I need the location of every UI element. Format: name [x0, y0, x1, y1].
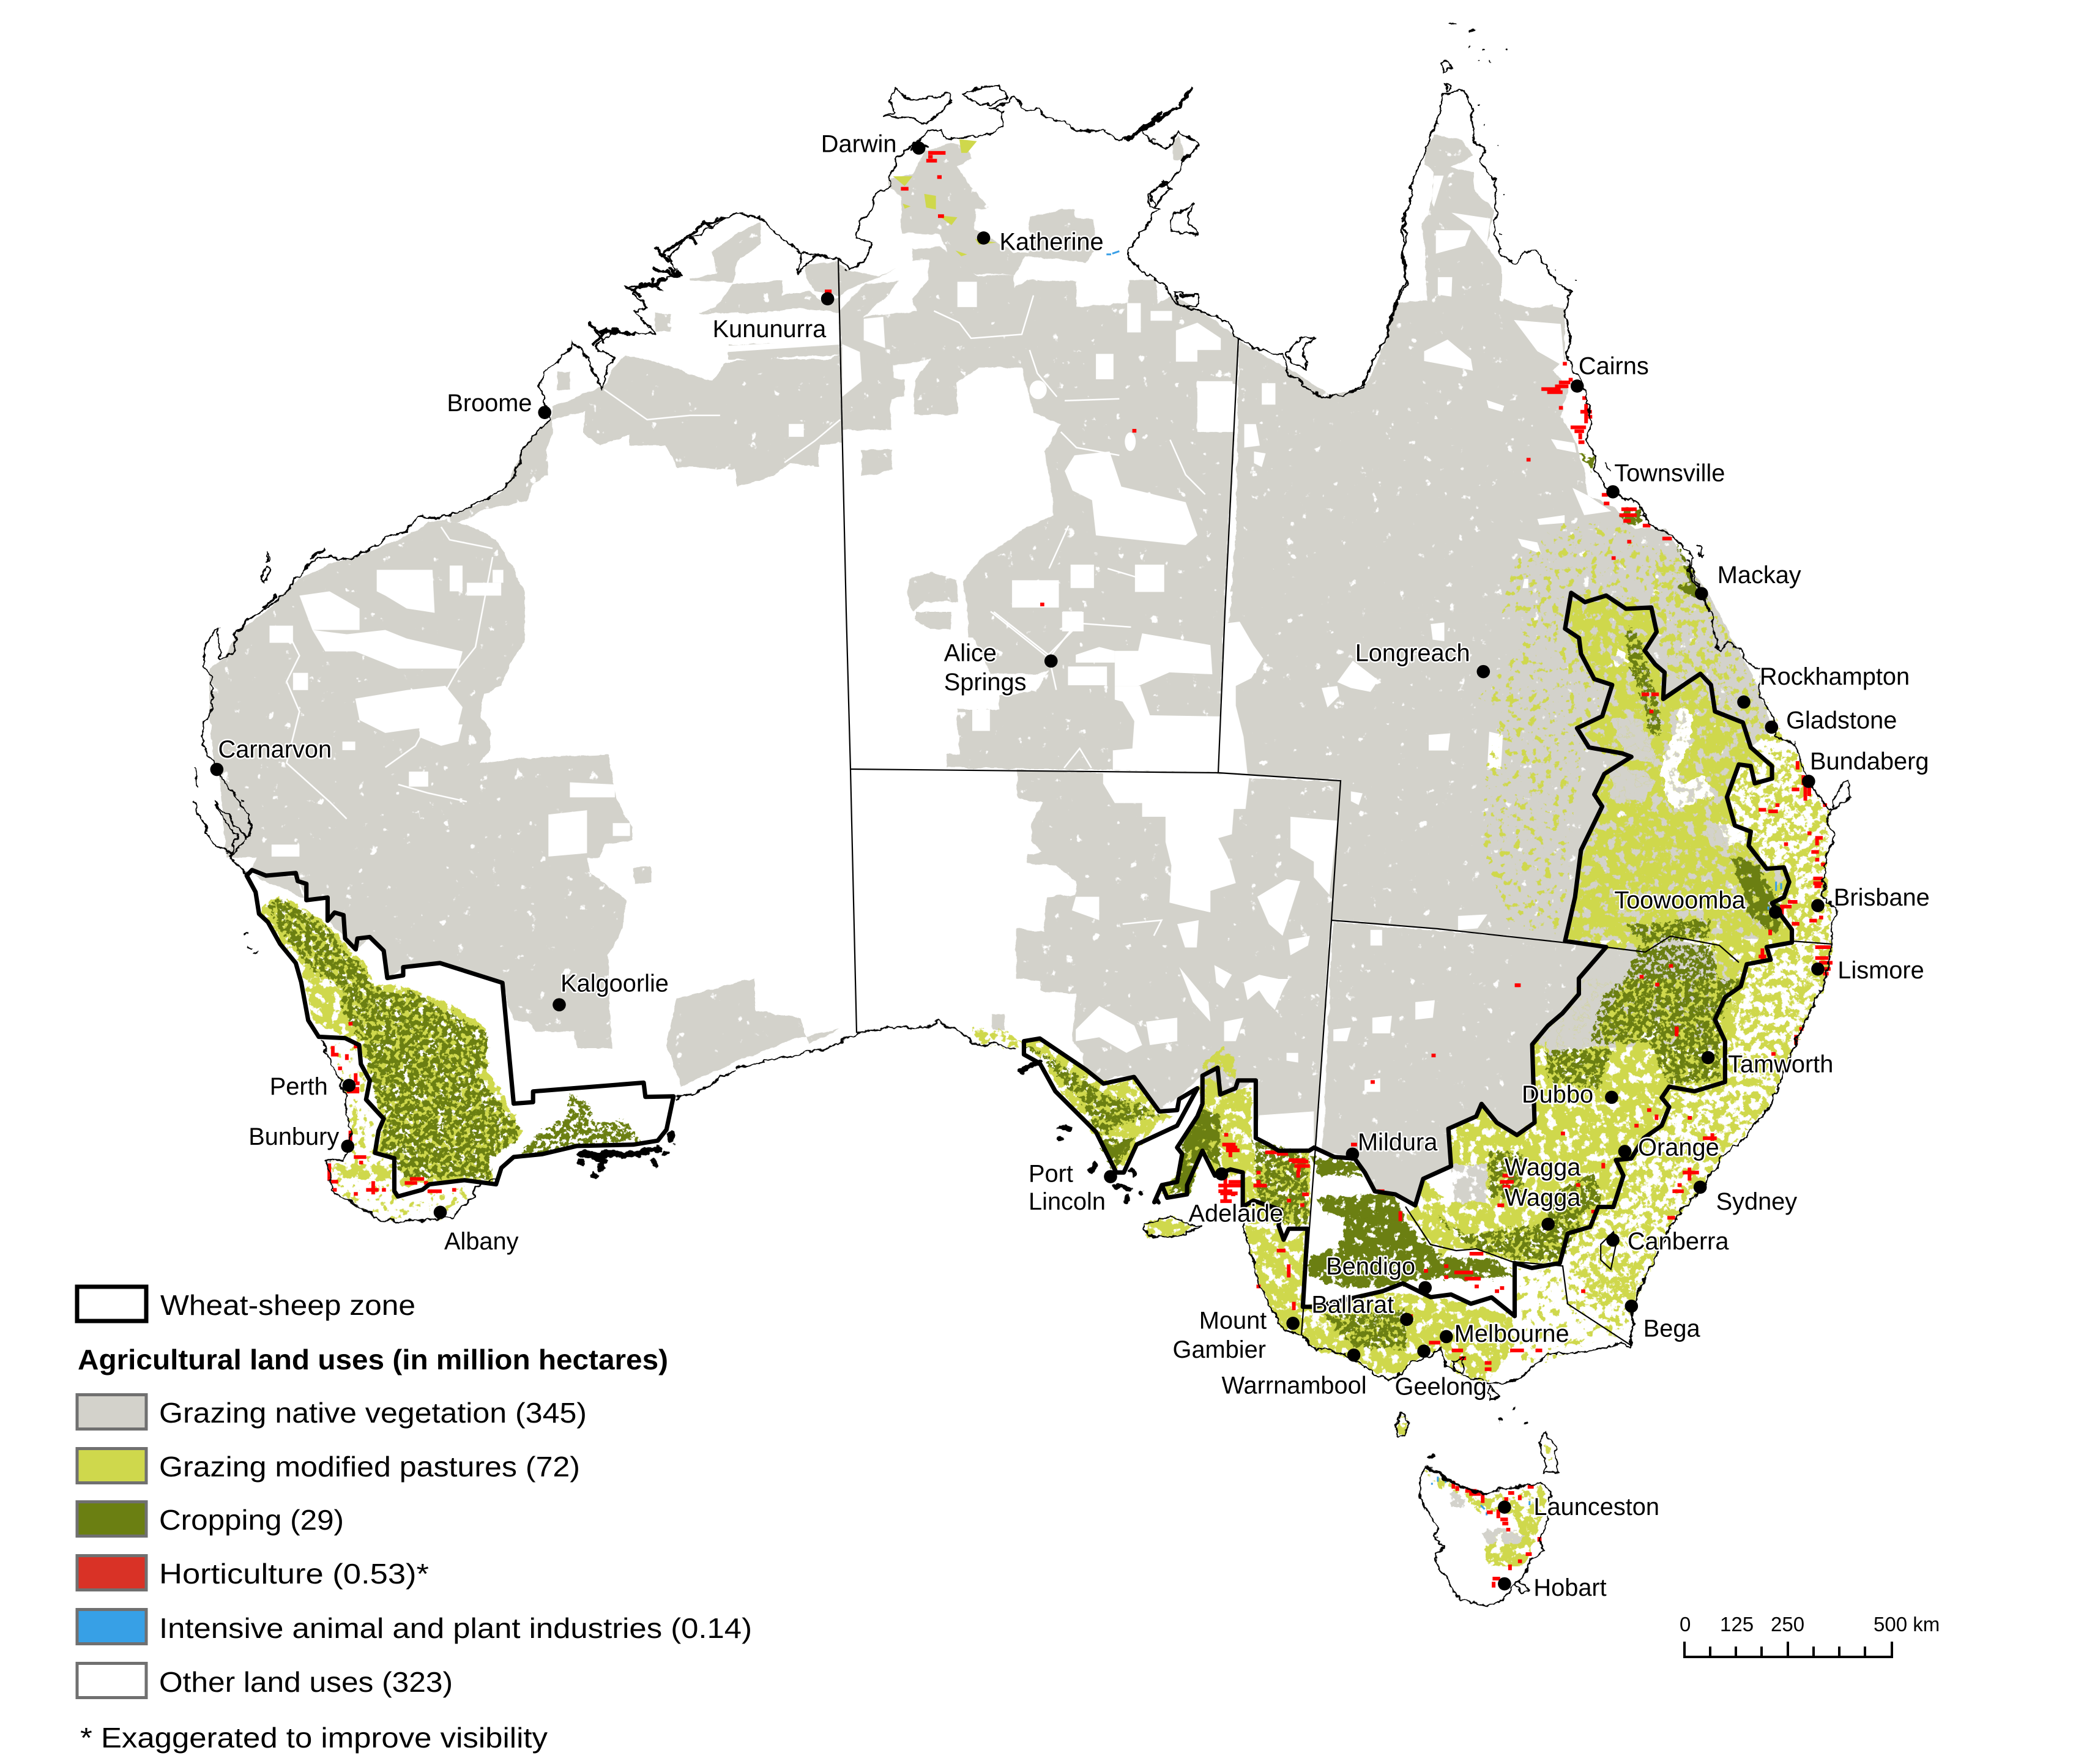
city: Bundaberg [1802, 748, 1929, 788]
city: Geelong: Geelong [1395, 1374, 1487, 1401]
legend item: other land uses: Other land uses (323) [159, 1666, 453, 1698]
city: Orange: Orange [1638, 1134, 1719, 1161]
city: Port Lincoln: Port [1029, 1161, 1073, 1188]
land use: cropping [268, 453, 1782, 1350]
coastline: Northern Territory [795, 96, 1407, 396]
city: Bendigo: Bendigo [1326, 1253, 1415, 1280]
legend footnote: * Exaggerated to improve visibility [80, 1722, 548, 1754]
city: Wagga Wagga [1505, 1154, 1581, 1231]
city: Sydney: Sydney [1716, 1188, 1797, 1215]
city: Longreach: Longreach [1355, 639, 1470, 666]
city: Broome: Broome [447, 390, 532, 417]
legend item: cropping [77, 1502, 344, 1536]
city: Cairns: Cairns [1579, 352, 1649, 379]
pastures: very sparse western Queensland and south-west corner [327, 523, 1697, 1375]
city: Rockhampton [1737, 663, 1910, 709]
city: Mackay: Mackay [1718, 562, 1801, 589]
city: Sydney [1694, 1181, 1797, 1215]
land use: grazing native vegetation [209, 135, 1811, 1205]
coastline: central Queensland to New South Wales [1686, 560, 1850, 1040]
coastline: south-west Western Australia [229, 857, 734, 1221]
horticulture: Top End and Kununurra [827, 153, 1134, 605]
city: Kalgoorlie [553, 970, 669, 1011]
city: Port Lincoln: Lincoln [1029, 1188, 1106, 1215]
horticulture: south-east mainland [1220, 985, 1801, 1369]
coastline: Western Australia north-west [203, 212, 838, 857]
city: Alice Springs [944, 639, 1058, 696]
city: Ballarat: Ballarat [1311, 1292, 1394, 1319]
land use: Top End pastures [893, 140, 996, 256]
cropping: main belts [268, 625, 1740, 1350]
cropping: solid blocks [1099, 453, 1782, 1288]
city: Dubbo: Dubbo [1522, 1081, 1593, 1108]
legend item: horticulture: Horticulture (0.53)* [159, 1558, 429, 1590]
coastline: Cape York and north Queensland [1346, 90, 1709, 612]
scale bar: 500 km [1874, 1613, 1940, 1636]
city: Mildura: Mildura [1358, 1129, 1438, 1156]
city: Cairns [1571, 352, 1649, 393]
horticulture: South Australia Gulf [1220, 1135, 1355, 1205]
city: Bundaberg: Bundaberg [1810, 748, 1929, 775]
city: Kununurra: Kununurra [713, 316, 827, 343]
city: Bendigo [1326, 1253, 1432, 1294]
horticulture: north Queensland coast [1528, 363, 1670, 558]
city: Alice Springs: Springs [944, 669, 1027, 696]
city: Townsville: Townsville [1614, 460, 1725, 486]
scale bar: 0 [1680, 1613, 1691, 1636]
land use: grazing modified pastures [261, 523, 1833, 1566]
city: Katherine: Katherine [999, 228, 1104, 255]
legend heading: Agricultural land uses (in million hectares) [78, 1344, 668, 1375]
legend item: other land uses [77, 1663, 453, 1698]
city markers and labels [210, 130, 1930, 1601]
legend item: grazing native vegetation: Grazing native vegetation (345) [159, 1397, 587, 1429]
legend item: intensive animal and plant industries: Intensive animal and plant industries (0.14) [159, 1612, 752, 1644]
wheat-sheep zone boundary [247, 593, 1792, 1316]
coastline: Torres Strait and reef islets [1443, 23, 1705, 556]
zone: eastern states [1155, 593, 1792, 1316]
legend item: wheat-sheep zone [77, 1287, 415, 1321]
city: Port Lincoln [1029, 1161, 1117, 1215]
city: Warrnambool [1221, 1349, 1367, 1399]
rivers: white creek lines across grazing land [286, 296, 1205, 936]
city: Launceston: Launceston [1533, 1494, 1659, 1520]
city: Tamworth: Tamworth [1728, 1051, 1833, 1077]
city: Townsville [1606, 460, 1725, 499]
city: Adelaide: Adelaide [1188, 1200, 1283, 1227]
city: Bega [1625, 1300, 1700, 1342]
legend item: horticulture [77, 1555, 429, 1590]
city: Toowoomba: Toowoomba [1614, 887, 1746, 914]
land use: horticulture [329, 153, 1831, 1586]
city: Carnarvon [210, 736, 332, 776]
horticulture: south-west Western Australia [329, 1024, 455, 1194]
city: Warrnambool: Warrnambool [1221, 1372, 1367, 1399]
zone: Western Australia [247, 870, 674, 1196]
city: Carnarvon: Carnarvon [218, 736, 332, 763]
state and territory borders [838, 258, 1833, 1345]
city: Canberra: Canberra [1628, 1228, 1729, 1255]
coastline: Kimberley islands and Shark Bay [195, 218, 724, 853]
city: Melbourne: Melbourne [1454, 1320, 1569, 1347]
legend item: cropping: Cropping (29) [159, 1504, 344, 1536]
city: Mackay [1695, 562, 1801, 600]
city: Rockhampton: Rockhampton [1760, 663, 1910, 690]
city: Hobart: Hobart [1533, 1574, 1607, 1601]
city: Wagga Wagga: Wagga [1505, 1154, 1581, 1181]
coastline: Eyre Peninsula islands [1021, 1063, 1158, 1202]
city: Lismore: Lismore [1837, 957, 1924, 984]
city: Wagga Wagga: Wagga [1505, 1185, 1581, 1211]
city: Perth: Perth [270, 1073, 328, 1100]
city: Ballarat [1311, 1292, 1413, 1326]
city: Adelaide [1188, 1167, 1283, 1227]
city: Albany: Albany [444, 1228, 519, 1255]
coastline: Great Australian Bight [735, 1022, 1018, 1068]
scale bar [1680, 1613, 1940, 1657]
coastline: Tasmania, King and Flinders islands [1397, 1409, 1559, 1606]
scale bar: 125 [1720, 1613, 1754, 1636]
horticulture: east coast Queensland and New South Wales [1517, 694, 1831, 1035]
pastures: dense Queensland and New South Wales zones [261, 594, 1792, 1566]
land use: other land uses (white gaps) [269, 176, 1831, 1375]
legend item: grazing modified pastures: Grazing modified pastures (72) [159, 1451, 580, 1483]
pastures: sparse coastal belts [1558, 551, 1801, 1332]
scale bar: 250 [1771, 1613, 1804, 1636]
city: Brisbane: Brisbane [1834, 884, 1930, 911]
map: Australia agricultural land use [195, 23, 1930, 1606]
city: Albany [434, 1206, 519, 1255]
city: Kununurra [713, 292, 834, 343]
coastline: south-east mainland to Adelaide [1243, 998, 1817, 1385]
city: Kalgoorlie: Kalgoorlie [560, 970, 669, 997]
coastline: mainland and islands [195, 23, 1850, 1606]
city: Bega: Bega [1643, 1315, 1700, 1342]
city: Alice Springs: Alice [944, 639, 997, 666]
horticulture: Tasmania [1453, 1483, 1539, 1586]
city: Mount Gambier: Mount [1199, 1308, 1267, 1334]
coastline: Kangaroo Island and Bass Strait [1144, 1216, 1499, 1401]
land use: intensive animal and plant industries [1106, 251, 1781, 1516]
city: Bunbury: Bunbury [248, 1123, 339, 1150]
city: Geelong [1395, 1344, 1487, 1401]
legend item: wheat-sheep zone: Wheat-sheep zone [160, 1289, 415, 1321]
city: Darwin: Darwin [821, 130, 896, 157]
city: Toowoomba [1614, 887, 1782, 919]
pastures: mixed coastal belt [972, 754, 1833, 1519]
city: Perth [270, 1073, 355, 1100]
land use: white and grey patches mixed into the eastern zone [1450, 647, 1747, 1544]
city: Mount Gambier [1173, 1308, 1300, 1363]
city: Mount Gambier: Gambier [1173, 1336, 1266, 1363]
legend [77, 1287, 752, 1754]
zone: Eyre Peninsula [1024, 1038, 1197, 1172]
city: Longreach [1355, 639, 1490, 678]
city: Hobart [1498, 1574, 1607, 1601]
city: Gladstone: Gladstone [1786, 707, 1897, 734]
coastline: Tiwi, Groote and Gulf islands [884, 84, 1314, 370]
